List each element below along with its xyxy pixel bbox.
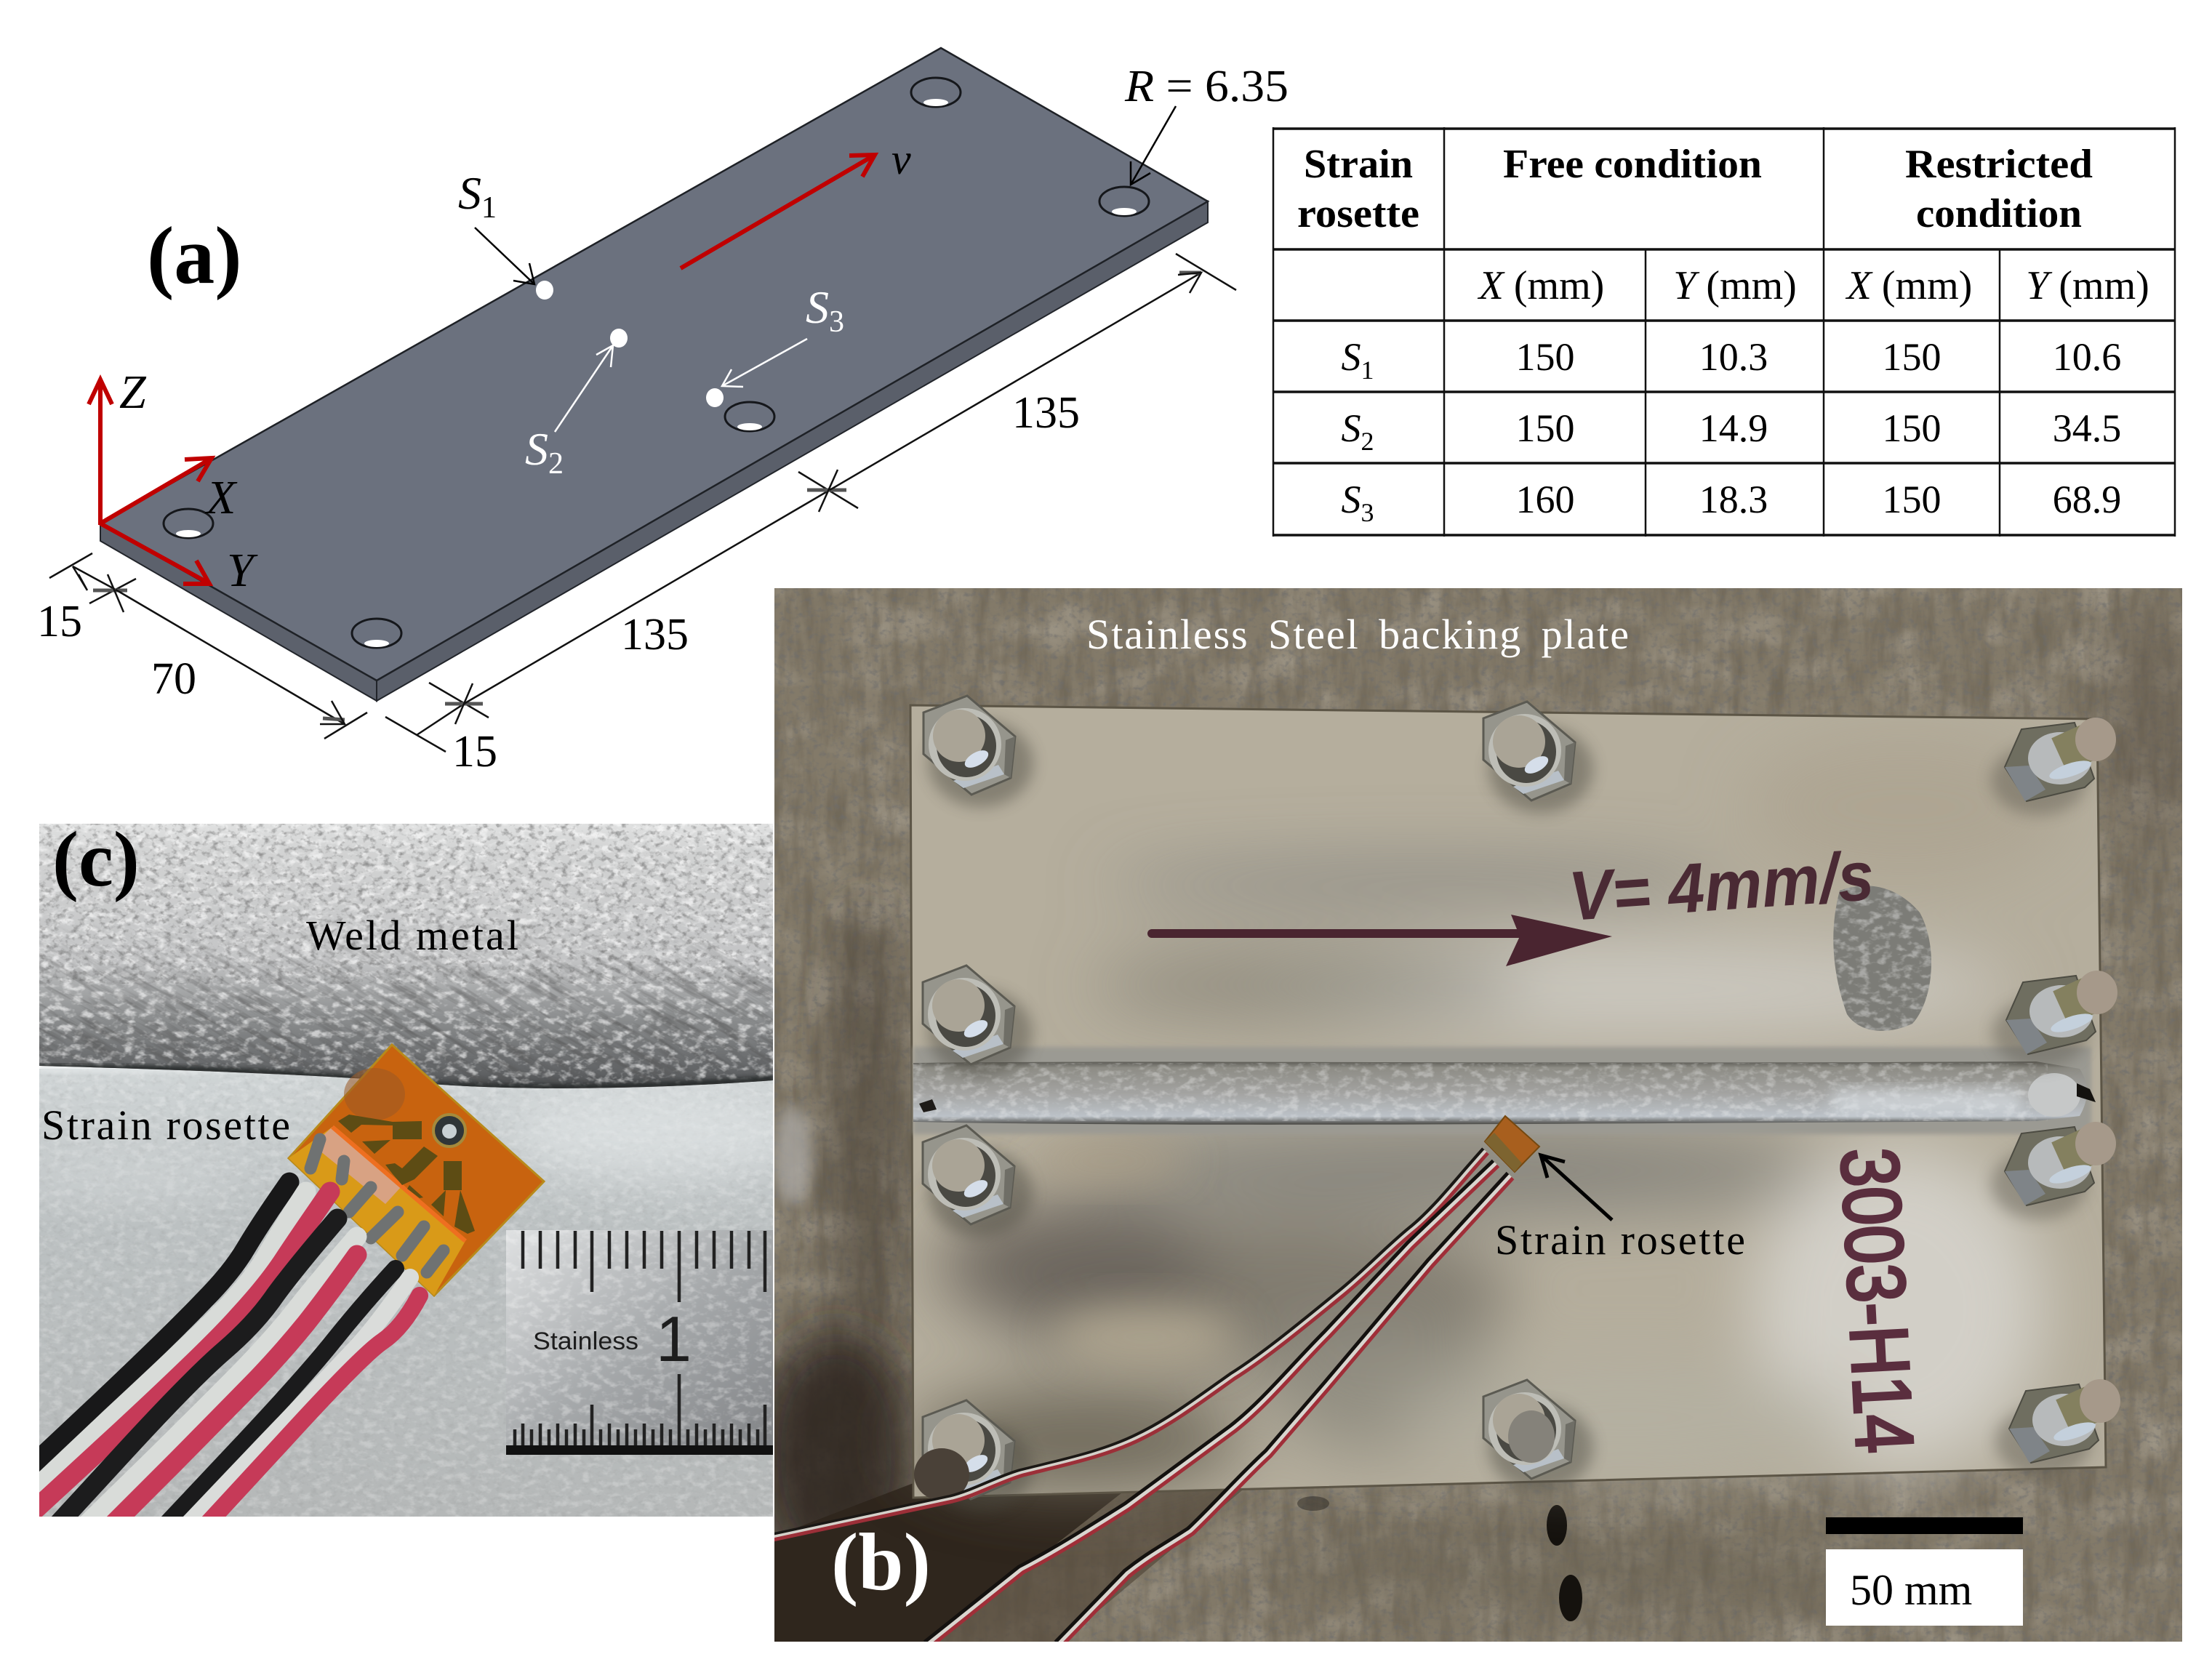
table row S2 [1341,406,2121,456]
label: weld metal: Weld metal [306,912,518,959]
coordinate axes: Z [119,366,147,419]
dimension labels: 70 [151,654,196,704]
table units row: Y (mm) [1673,263,1797,308]
table row S1: 150 [1515,335,1575,379]
dimension labels: 15 [37,597,82,646]
sensor S3: 3 [829,305,844,339]
plate side faces [100,201,1208,701]
sensor S2 [525,329,628,481]
label: backing plate: Stainless Steel backing plate [1086,611,1629,658]
table row S2: 34.5 [2053,406,2121,450]
table row S1: S [1341,335,1361,379]
dimension labels: 135 [621,610,689,659]
table row S2: 14.9 [1699,406,1768,450]
label: strain rosette: Strain rosette [1495,1216,1745,1264]
scale bar [1826,1517,2023,1626]
sensor S3 [706,281,844,407]
table row S3: 3 [1361,498,1374,527]
backing plate background [756,588,2196,1645]
table row S1: 150 [1882,335,1941,379]
solder joints [310,1139,444,1272]
grey patch [1833,886,1931,1031]
marker text: alloy: 3003-H14 [1824,1146,1931,1456]
sensor S1: 1 [481,191,497,225]
aluminium workpiece [909,705,2106,1498]
steel ruler: Stainless [533,1328,638,1355]
weld bead [0,593,982,1542]
table units row [1478,263,2149,308]
sensor S2: S [525,423,548,475]
steel ruler [506,1230,773,1455]
dimension lines [49,254,1236,752]
table row S1 [1341,335,2121,385]
panel c letter: (c) [52,816,140,903]
panel a letter: (a) [147,211,242,301]
label: v: v [891,135,911,183]
table row S3: S [1341,478,1361,521]
strain rosette gauge [289,1045,544,1296]
bolt holes [164,78,1149,648]
sensor S3: S [806,281,829,333]
coordinate axes: Y [227,544,258,597]
panel c: strain rosette close-up photo [0,593,982,1542]
marker text: speed: V= 4mm/s [1566,837,1876,936]
dimension labels: 135 [1012,388,1080,438]
table row S3: 18.3 [1699,478,1768,521]
table header: Strain [1304,142,1413,187]
base metal [22,1066,800,1517]
table header: Restricted [1905,142,2093,187]
panel a: plate schematic [37,48,1289,776]
table row S1: 10.3 [1699,335,1768,379]
table row S2: 2 [1361,427,1374,456]
table row S1: 1 [1361,356,1374,385]
plate top face [100,48,1208,681]
table row S3 [1341,478,2121,527]
dimension labels [37,388,1080,776]
table units row: Y (mm) [2026,263,2149,308]
lead wire bundles [29,1182,420,1524]
table header: condition [1916,191,2082,236]
scale bar: 50 mm [1850,1566,1972,1614]
coordinate axes [89,366,258,597]
table row S1: 10.6 [2053,335,2121,379]
arrow to rosette [1541,1155,1612,1220]
lead wires [769,1149,1512,1647]
label: strain rosette: Strain rosette [41,1101,290,1149]
table: rosette coordinates [1273,127,2175,537]
table row S3: 150 [1882,478,1941,521]
panel b letter: (b) [831,1517,931,1607]
marker arrow [1147,915,1612,966]
panel b: welded plate photo [756,588,2196,1647]
table row S3: 68.9 [2053,478,2121,521]
small strain rosette [1485,1116,1539,1172]
table units row: X (mm) [1478,263,1604,308]
coordinate axes: X [204,471,238,524]
steel ruler: 1 [656,1303,692,1375]
table header: rosette [1297,191,1419,236]
dimension labels: 15 [452,727,497,776]
arrow: welding direction v [681,155,875,268]
sensor S2: 2 [548,447,564,481]
sensor S1 [458,167,553,300]
table grid [1273,127,2175,537]
weld bead [913,1047,2096,1134]
table row S3: 160 [1515,478,1575,521]
sensor S1: S [458,167,481,219]
table row S2: S [1341,406,1361,450]
table row S2: 150 [1515,406,1575,450]
table header [1297,142,2093,236]
table row S2: 150 [1882,406,1941,450]
dark floor stains [1297,1496,1582,1621]
table units row: X (mm) [1846,263,1972,308]
radius callout [1124,62,1289,185]
table header: Free condition [1503,142,1762,187]
bolts [914,696,2120,1512]
radius callout: R = 6.35 [1124,62,1289,111]
